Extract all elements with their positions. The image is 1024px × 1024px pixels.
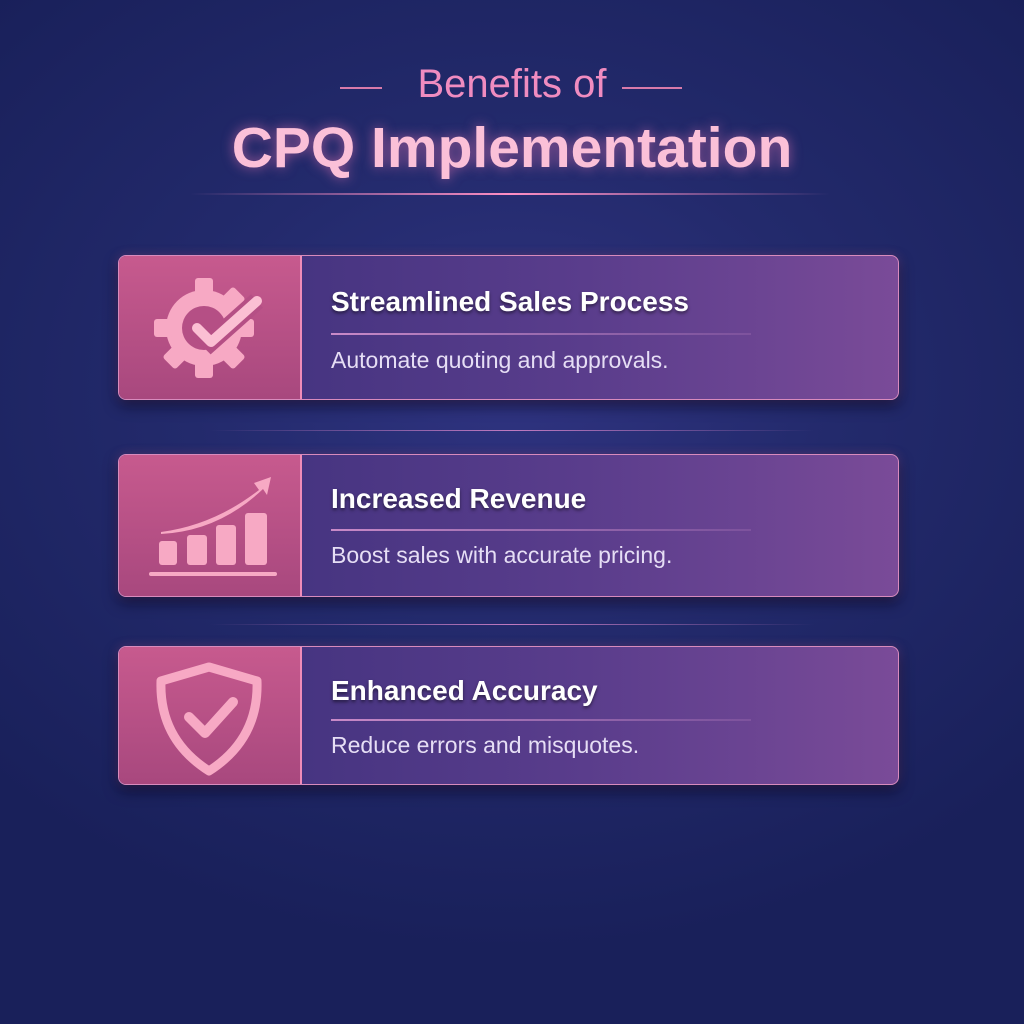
icon: bar chart arrow xyxy=(119,455,302,596)
heading: Increased Revenue xyxy=(331,483,586,514)
icon: shield check xyxy=(119,647,302,784)
panel: enhanced accuracy xyxy=(118,646,899,785)
heading: Enhanced Accuracy xyxy=(331,675,598,706)
panel: increased revenue xyxy=(118,454,899,597)
icon: gear check xyxy=(119,256,302,399)
subtitle: Benefits of xyxy=(417,62,606,106)
heading: Streamlined Sales Process xyxy=(331,286,689,317)
title xyxy=(202,62,818,195)
panel: streamlined sales process xyxy=(118,255,899,400)
main heading: CPQ Implementation xyxy=(232,116,792,180)
description: Boost sales with accurate pricing. xyxy=(331,542,672,568)
description: Reduce errors and misquotes. xyxy=(331,732,639,758)
description: Automate quoting and approvals. xyxy=(331,347,669,373)
